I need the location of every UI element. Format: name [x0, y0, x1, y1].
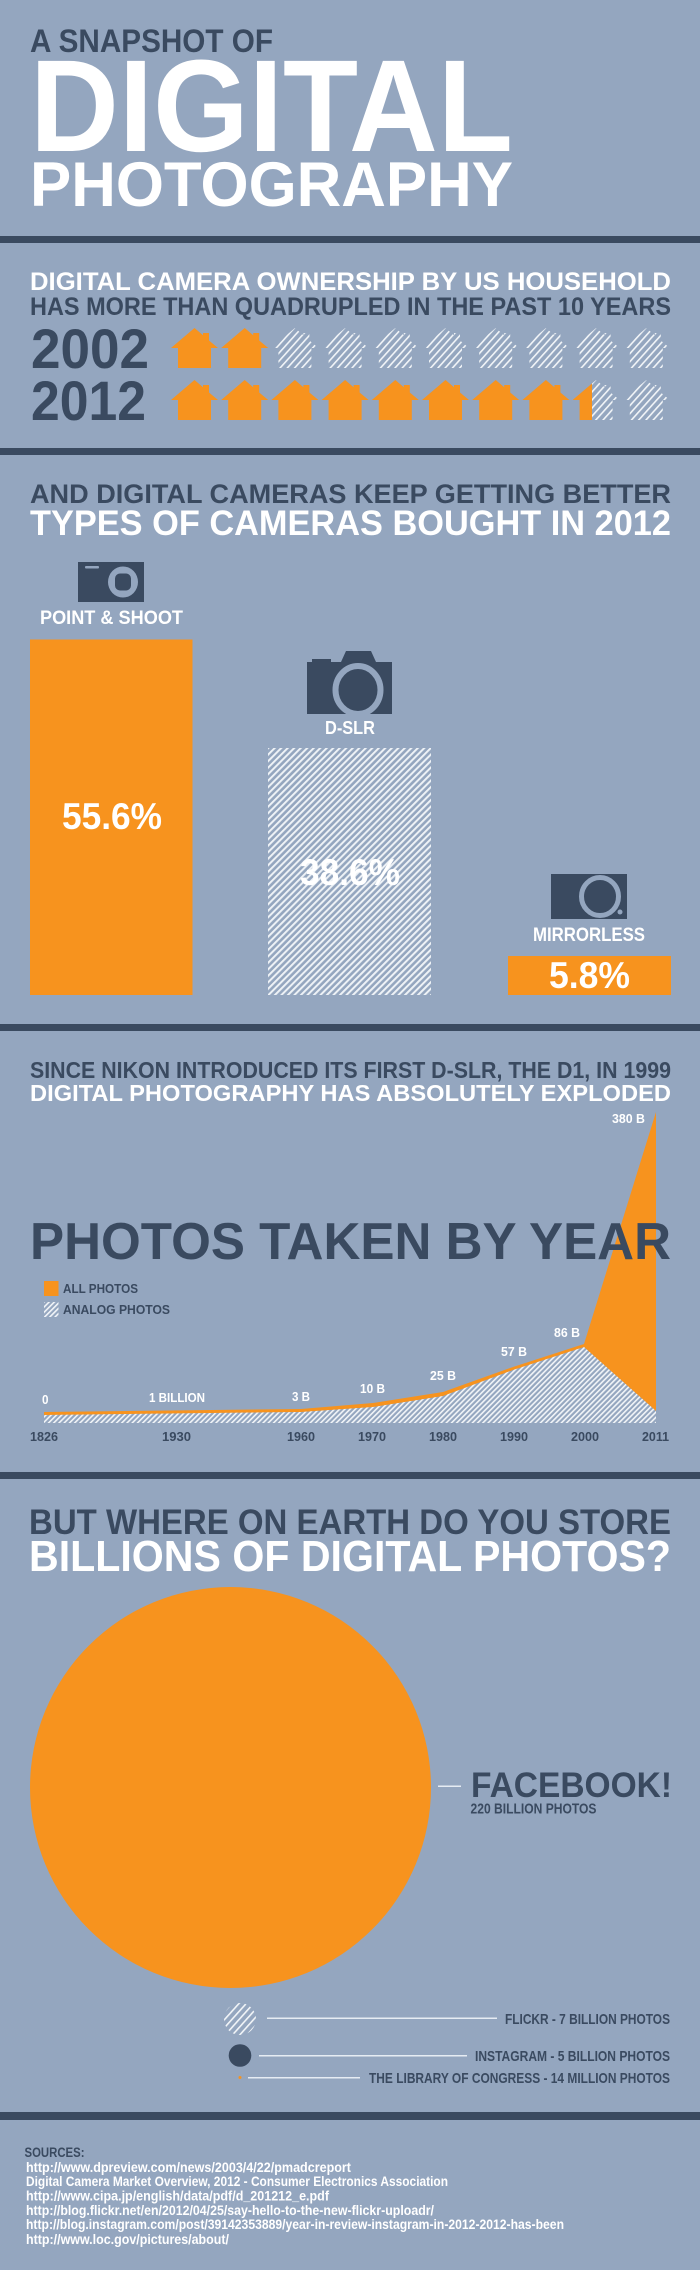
- axis years: [30, 1429, 669, 1444]
- icon: compact camera: [78, 562, 144, 602]
- house row: 2012: 2012: [31, 369, 146, 432]
- title: PHOTOGRAPHY: [30, 150, 513, 220]
- data labels: 10 B: [360, 1381, 385, 1396]
- sources: http://www.dpreview.com/news/2003/4/22/pmadcreport: [26, 2160, 351, 2175]
- data labels: 380 B: [612, 1111, 645, 1126]
- bar: d-slr: D-SLR: [325, 718, 375, 738]
- heading: camera ownership: HAS MORE THAN QUADRUPLED IN THE PAST 10 YEARS: [30, 293, 671, 321]
- sources: http://www.loc.gov/pictures/about/: [26, 2232, 229, 2247]
- bar: point and shoot: POINT & SHOOT: [40, 608, 183, 629]
- area chart: photos taken by year: [30, 1111, 669, 1444]
- series: all photos: [44, 1112, 656, 1415]
- sources: http://blog.flickr.net/en/2012/04/25/say-hello-to-the-new-flickr-uploadr/: [26, 2203, 434, 2218]
- axis years: 1970: [358, 1429, 386, 1444]
- heading: explosion: DIGITAL PHOTOGRAPHY HAS ABSOLUTELY EXPLODED: [30, 1080, 671, 1106]
- axis years: 1980: [429, 1429, 457, 1444]
- data labels: 25 B: [430, 1368, 456, 1383]
- house row: 2012: [32, 380, 667, 420]
- series: analog photos: [44, 1347, 656, 1423]
- heading: camera types: [30, 479, 671, 543]
- axis years: 1826: [30, 1429, 58, 1444]
- heading: explosion: SINCE NIKON INTRODUCED ITS FIRST D-SLR, THE D1, IN 1999: [30, 1057, 671, 1083]
- bubble: facebook: 220 BILLION PHOTOS: [470, 1800, 596, 1818]
- chart title: PHOTOS TAKEN BY YEAR: [30, 1213, 671, 1271]
- sources: SOURCES:: [24, 2145, 84, 2160]
- heading: storage: BUT WHERE ON EARTH DO YOU STORE: [29, 1503, 671, 1542]
- title: A SNAPSHOT OF: [30, 23, 273, 59]
- bar: mirrorless: [508, 874, 671, 996]
- axis years: 2011: [642, 1429, 669, 1444]
- data labels: 1 BILLION: [149, 1390, 205, 1405]
- bubble: library of congress: [238, 2070, 670, 2087]
- bar: mirrorless: MIRRORLESS: [533, 925, 645, 946]
- bar: d-slr: 38.6%: [300, 852, 400, 893]
- heading: camera ownership: [30, 268, 671, 321]
- bubble: facebook: [30, 1587, 672, 1988]
- data labels: 3 B: [292, 1389, 310, 1404]
- legend: ALL PHOTOS: [63, 1281, 138, 1296]
- axis years: 1930: [162, 1429, 191, 1444]
- axis years: 2000: [571, 1429, 599, 1444]
- legend: ANALOG PHOTOS: [63, 1302, 170, 1317]
- heading: explosion: [30, 1057, 671, 1106]
- bar: d-slr: [268, 651, 431, 995]
- bar: point and shoot: [30, 562, 192, 995]
- sources: Digital Camera Market Overview, 2012 - Consumer Electronics Association: [26, 2174, 448, 2189]
- icon: dslr camera: [307, 651, 392, 714]
- data labels: [42, 1111, 645, 1407]
- heading: camera types: TYPES OF CAMERAS BOUGHT IN 2012: [30, 504, 671, 543]
- icon: mirrorless camera: [551, 874, 627, 919]
- axis years: 1960: [287, 1429, 315, 1444]
- heading: camera ownership: DIGITAL CAMERA OWNERSHIP BY US HOUSEHOLD: [30, 268, 671, 296]
- axis years: 1990: [500, 1429, 528, 1444]
- heading: camera types: AND DIGITAL CAMERAS KEEP GETTING BETTER: [30, 479, 671, 509]
- house row: 2002: [31, 317, 670, 380]
- data labels: 86 B: [554, 1325, 580, 1340]
- title: DIGITAL: [30, 32, 513, 179]
- bar: point and shoot: 55.6%: [62, 796, 162, 837]
- house row: 2002: 2002: [31, 317, 149, 380]
- bubble: instagram: [229, 2044, 670, 2067]
- bubble: facebook: FACEBOOK!: [471, 1766, 672, 1805]
- data labels: 0: [42, 1392, 48, 1407]
- sources: [24, 2145, 564, 2247]
- bar: mirrorless: 5.8%: [549, 955, 630, 996]
- heading: storage: BILLIONS OF DIGITAL PHOTOS?: [29, 1532, 671, 1581]
- legend: [44, 1281, 170, 1317]
- heading: storage: [29, 1503, 671, 1581]
- bubble: flickr: [224, 2003, 670, 2035]
- data labels: 57 B: [501, 1344, 527, 1359]
- sources: http://blog.instagram.com/post/39142353889/year-in-review-instagram-in-2012-2012-has-been: [26, 2217, 564, 2232]
- sources: http://www.cipa.jp/english/data/pdf/d_201212_e.pdf: [26, 2188, 329, 2204]
